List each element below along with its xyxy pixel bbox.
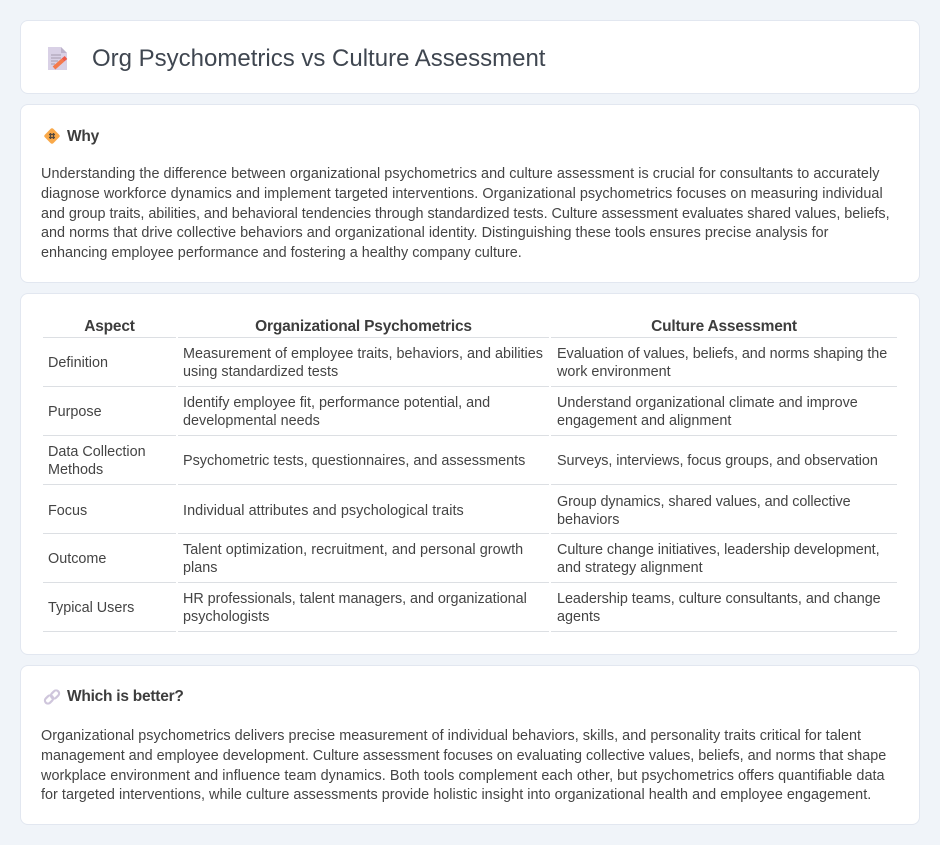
- table header: [84, 318, 797, 335]
- row: outcome: Outcome: [48, 551, 106, 567]
- table header: Aspect: [84, 318, 135, 335]
- row: definition: Measurement of employee traits, behaviors, and abilities: [183, 346, 543, 362]
- panel: header: [20, 20, 920, 94]
- row: focus: [48, 494, 851, 528]
- table header: Organizational Psychometrics: [255, 318, 472, 335]
- icon: document with pencil: [48, 47, 68, 70]
- row: typical users: agents: [557, 609, 600, 625]
- row: focus: Focus: [48, 503, 87, 519]
- panel: why: [20, 104, 920, 283]
- text block: why: Understanding the difference between organizational psychometrics and culture assessment is crucial for consultants to accurately: [41, 166, 879, 182]
- row: typical users: [48, 591, 881, 625]
- row: definition: [48, 346, 887, 380]
- panel: which is better: [20, 665, 920, 825]
- text block: why: enhancing employee performance and fostering a healthy company culture.: [41, 245, 522, 261]
- row: purpose: Identify employee fit, performance potential, and: [183, 395, 490, 411]
- text block: which is better: [41, 728, 886, 803]
- row: data collection methods: Data Collection: [48, 444, 146, 460]
- text block: which is better: for targeted interventions, while culture assessments provide holistic insight into organizational health and employee engagement.: [41, 787, 871, 803]
- icon: warning diamond: [44, 128, 60, 144]
- text block: which is better: management and employee development. Culture assessment focuses on evaluating collective values, beliefs, and norms that shape: [41, 748, 886, 764]
- text block: why: [41, 166, 890, 261]
- row: typical users: Typical Users: [48, 600, 134, 616]
- row: data collection methods: Surveys, interviews, focus groups, and observation: [557, 453, 878, 469]
- row: outcome: [48, 542, 880, 576]
- row: focus: behaviors: [557, 512, 619, 528]
- row: data collection methods: [48, 444, 878, 478]
- row: outcome: Culture change initiatives, leadership development,: [557, 542, 880, 558]
- row: data collection methods: Psychometric tests, questionnaires, and assessments: [183, 453, 525, 469]
- row: outcome: and strategy alignment: [557, 560, 703, 576]
- row: typical users: psychologists: [183, 609, 269, 625]
- row: typical users: HR professionals, talent managers, and organizational: [183, 591, 527, 607]
- row: purpose: Understand organizational climate and improve: [557, 395, 858, 411]
- row: purpose: [48, 395, 858, 429]
- heading: which is better: Which is better?: [67, 688, 184, 705]
- row: outcome: Talent optimization, recruitment, and personal growth: [183, 542, 523, 558]
- text block: why: diagnose workforce dynamics and implement targeted interventions. Organizational psychometrics focuses on measuring individual: [41, 186, 883, 202]
- title: Org Psychometrics vs Culture Assessment: [92, 45, 545, 72]
- row: purpose: engagement and alignment: [557, 413, 731, 429]
- row: definition: using standardized tests: [183, 364, 338, 380]
- heading: why: Why: [67, 128, 99, 145]
- row: focus: Individual attributes and psychological traits: [183, 503, 464, 519]
- text block: which is better: Organizational psychometrics delivers precise measurement of individual behaviors, skills, and personality traits critical for talent: [41, 728, 861, 744]
- row: definition: Evaluation of values, beliefs, and norms shaping the: [557, 346, 887, 362]
- row: definition: Definition: [48, 355, 108, 371]
- row: outcome: plans: [183, 560, 217, 576]
- row: typical users: Leadership teams, culture consultants, and change: [557, 591, 881, 607]
- text block: why: and norms that drive collective behaviors and organizational identity. Distinguishing these tools ensures precise analysis for: [41, 225, 828, 241]
- table header: Culture Assessment: [651, 318, 797, 335]
- row: purpose: Purpose: [48, 404, 102, 420]
- panel: comparison table: [20, 293, 920, 655]
- icon: link: [44, 689, 60, 705]
- row: purpose: developmental needs: [183, 413, 320, 429]
- row: data collection methods: Methods: [48, 462, 103, 478]
- row: definition: work environment: [557, 364, 671, 380]
- row: focus: Group dynamics, shared values, and collective: [557, 494, 851, 510]
- text block: which is better: workplace environment and influence team dynamics. Both tools complement each other, but psychometrics offers quantifiable data: [41, 768, 885, 784]
- text block: why: and group traits, abilities, and behavioral tendencies through standardized tests. Culture assessment evaluates shared values, beliefs,: [41, 206, 890, 222]
